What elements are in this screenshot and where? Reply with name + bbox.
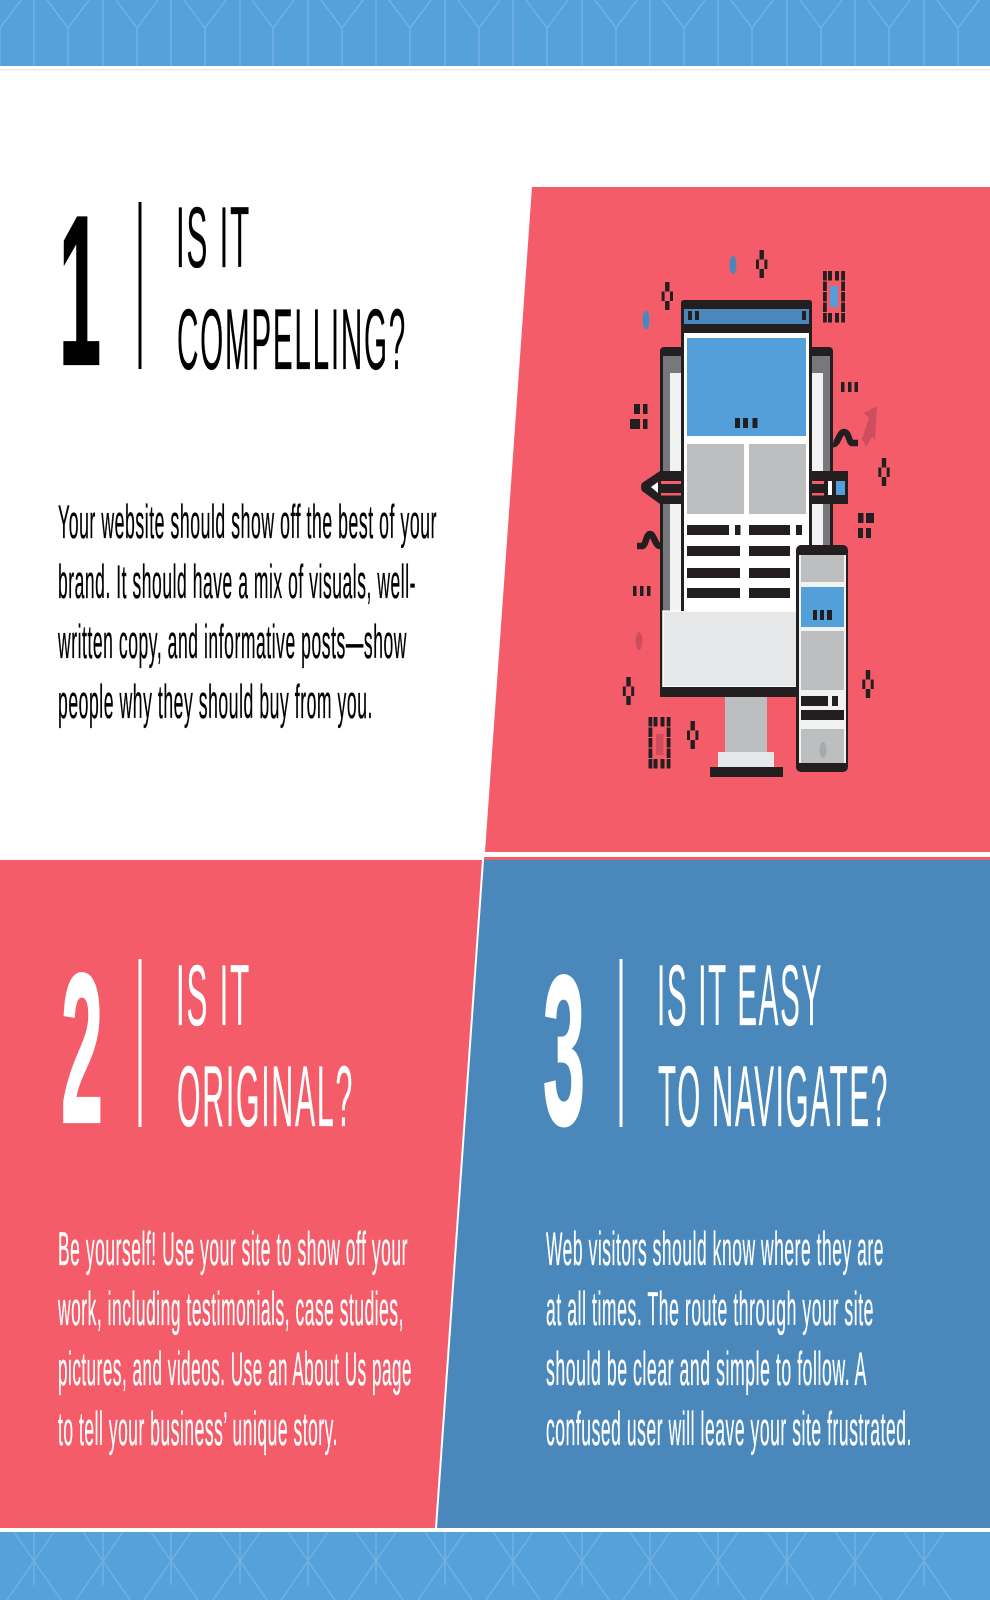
section 1 body text <box>58 495 437 728</box>
divider 3 <box>620 959 622 1127</box>
strip under illustration panel <box>484 857 990 861</box>
icon: blue ovals <box>642 256 736 330</box>
text: written copy, and informative posts—show <box>58 615 407 668</box>
section 1 heading <box>59 172 407 410</box>
icon: back monitor <box>660 347 833 697</box>
section 2 body text <box>58 1222 412 1455</box>
text: work, including testimonials, case studies, <box>58 1282 404 1335</box>
title 3 <box>657 948 889 1145</box>
panel: navigate <box>437 860 990 1528</box>
panel: original <box>0 860 482 1528</box>
divider 1 <box>138 202 142 369</box>
text: Be yourself! Use your site to show off your <box>58 1222 408 1275</box>
text: to tell your business’ unique story. <box>58 1402 338 1455</box>
section 2 heading: 2 <box>61 930 103 1168</box>
text: people why they should buy from you. <box>58 675 373 728</box>
icon: pencil <box>641 471 848 504</box>
decorative icons around devices <box>623 250 890 768</box>
section 1 heading: 1 <box>59 172 101 410</box>
icon: browser window <box>681 300 812 611</box>
title 1: IS IT <box>176 190 251 286</box>
text: COMPELLING? <box>177 292 407 388</box>
title 1 <box>176 190 407 388</box>
title 2: IS IT <box>176 948 251 1044</box>
section 2 heading <box>61 930 354 1168</box>
icon: squiggles <box>637 432 858 546</box>
title 2 <box>176 948 354 1145</box>
divider 2 <box>138 959 142 1127</box>
top patterned band <box>0 0 990 66</box>
section 3 body text <box>546 1222 912 1455</box>
panel: illustration background <box>485 187 990 852</box>
section 3 heading <box>543 932 889 1170</box>
icon: monitor stand <box>660 687 797 777</box>
bottom patterned band <box>0 1532 990 1600</box>
illustration: devices <box>641 300 848 777</box>
icon: arrow <box>862 406 877 447</box>
icon: small square clusters <box>630 382 874 596</box>
section 3 heading: 3 <box>543 932 585 1170</box>
text: ORIGINAL? <box>177 1049 354 1145</box>
icon: phone <box>796 545 848 772</box>
